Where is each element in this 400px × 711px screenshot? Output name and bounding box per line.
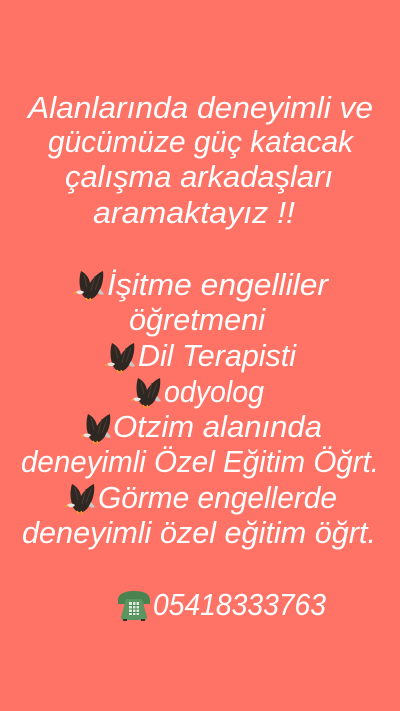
heading: çalışma arkadaşları — [65, 159, 333, 194]
text: autism special education teacher: deneyimli Özel Eğitim Öğrt. — [21, 444, 379, 479]
text: hearing impaired teacher — [107, 267, 330, 337]
icon: telephone — [118, 591, 150, 621]
text: visually impaired special education teacher — [22, 480, 376, 550]
text: hearing impaired teacher: öğretmeni — [129, 302, 266, 337]
icon: eagle 1 — [73, 271, 104, 301]
heading — [26, 90, 373, 230]
heading: gücümüze güç katacak — [48, 124, 354, 159]
text: audiologist: odyolog — [164, 374, 264, 409]
text: speech therapist: Dil Terapisti — [138, 338, 297, 373]
heading: Alanlarında deneyimli ve — [26, 90, 373, 125]
icon: eagle 2 — [104, 343, 135, 373]
text: phone number: 05418333763 — [153, 587, 326, 622]
text: visually impaired special education teacher: Görme engellerde — [98, 480, 337, 515]
icon: eagle 3 — [130, 378, 161, 408]
heading: aramaktayız !! — [93, 195, 295, 230]
text: visually impaired special education teacher: deneyimli özel eğitim öğrt. — [22, 515, 376, 550]
icon: eagle 4 — [80, 414, 111, 444]
text: autism special education teacher: Otzim alanında — [113, 409, 322, 444]
text: autism special education teacher — [21, 409, 379, 479]
text: hearing impaired teacher: İşitme engelliler — [107, 267, 330, 302]
icon: eagle 5 — [64, 484, 95, 514]
